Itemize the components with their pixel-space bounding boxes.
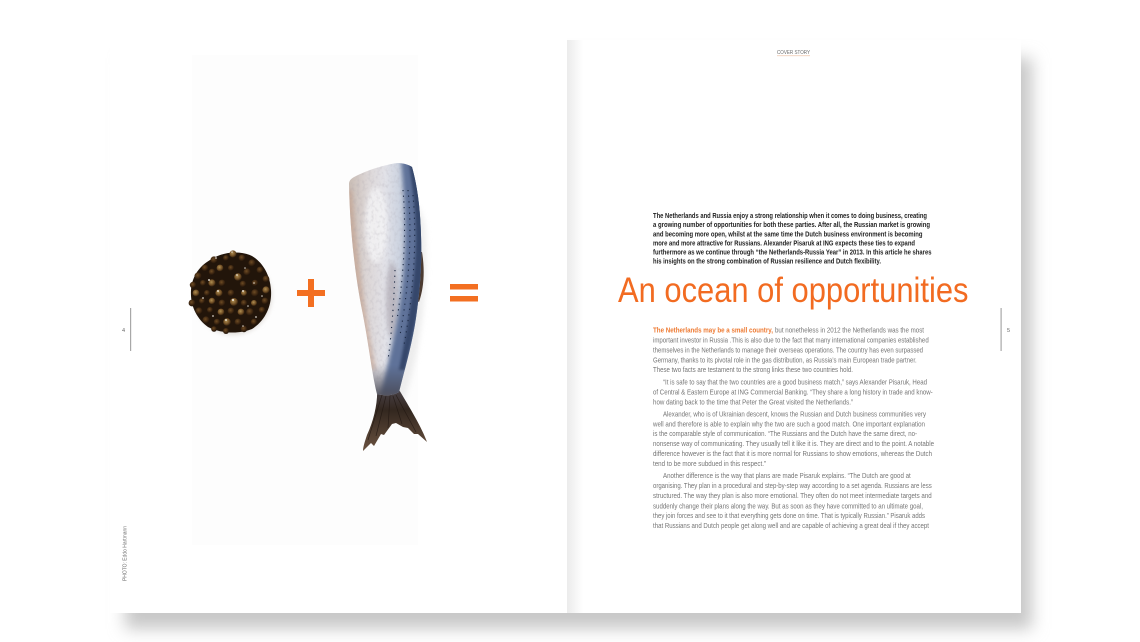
icon: herring fish — [345, 160, 427, 451]
text block: article body: Another difference is the way that plans are made Pisaruk explains. “The Dutch are good at — [663, 471, 911, 480]
gutter shading — [567, 40, 583, 613]
text block: article body: suddenly change their plans along the way. But as soon as they have committed to an ultimate goal, — [653, 501, 923, 510]
text block: article body: organising. They plan in a procedural and step-by-step way according to a set agenda. Russians are less — [653, 481, 932, 490]
text block: article body — [652, 326, 934, 530]
page marker: right page number: 5 — [1007, 328, 1010, 334]
text block: intro: The Netherlands and Russia enjoy a strong relationship when it comes to doing business, creating — [653, 211, 927, 220]
dorsal fin — [416, 252, 424, 302]
text block: intro — [653, 211, 932, 266]
text block: article body: difference however is the fact that it is more normal for Russians to show emotions, whereas the Dutch — [653, 449, 932, 458]
text block: article body: they join forces and see to it that everything gets done on time. That is typically Russian.” Pisaruk adds — [653, 511, 925, 520]
magazine spread drop shadow — [125, 58, 1032, 629]
text block: article body: of Central & Eastern Europe at ING Commercial Banking. “They share a long history in trade and know- — [653, 388, 933, 397]
page marker: left page number: 4 — [122, 328, 125, 334]
base of body shading — [372, 367, 404, 396]
text block: intro: furthermore as we continue through “the Netherlands-Russia Year” in 2013. In this article he shares — [653, 248, 932, 256]
fish body — [349, 163, 421, 395]
scale texture — [352, 164, 402, 370]
tail fin — [363, 388, 427, 451]
photo credit: PHOTO: Eddo Hartmann — [122, 526, 128, 581]
icon: equals sign — [450, 284, 478, 302]
text block: intro: and becoming more open, whilst at the same time the Dutch business environment is becoming — [653, 229, 922, 238]
page marker: left page number — [122, 308, 131, 351]
text block: article body: Alexander, who is of Ukrainian descent, knows the Russian and Dutch business communities very — [663, 409, 926, 418]
icon: plus sign — [297, 279, 325, 307]
text block: intro: more and more attractive for Russians. Alexander Pisaruk at ING expects these ties to expand — [653, 238, 915, 247]
text block: article body: themselves in the Netherlands to manage their overseas operations. The country has even surpassed — [653, 346, 923, 355]
text block: article body: how dating back to the time that Peter the Great visited the Netherlands.” — [653, 398, 853, 407]
title: An ocean of opportunities — [618, 270, 968, 310]
text block: article body: structured. The way they plan is also more emotional. They often do not meet intermediate targets and — [653, 491, 932, 500]
pale mottling — [346, 190, 376, 370]
text block: article body: important investor in Russia .This is also due to the fact that many international companies established — [653, 336, 929, 345]
tail fin rays — [368, 395, 416, 440]
text block: article body: nonsense way of communicating. They usually tell it like it is. They are direct and to the point. A notable — [653, 439, 934, 448]
text block: article body: The Netherlands may be a small country, — [653, 326, 773, 335]
panel: left page — [110, 30, 567, 613]
blue back band — [380, 160, 425, 395]
scale markings — [388, 190, 415, 360]
photo background — [192, 55, 418, 545]
text block: article body: “It is safe to say that the two countries are a good business match,” says Alexander Pisaruk, Head — [663, 378, 927, 387]
text block: article body: These two facts are testament to the strong links these two countries hold. — [653, 365, 853, 374]
text block: article body: tend to be more subdued in this respect.” — [653, 459, 766, 468]
icon: caviar — [189, 250, 272, 335]
panel: right page — [567, 40, 1021, 613]
text block: article body: Germany, thanks to its pivotal role in the gas distribution, as Russia’s main European trade partner. — [653, 356, 917, 365]
text block: article body: but nonetheless in 2012 the Netherlands was the most — [775, 326, 924, 335]
text block: intro: his insights on the strong combination of Russian resilience and Dutch flexibility. — [653, 257, 881, 266]
section label: COVER STORY — [777, 50, 810, 56]
text block: intro: a growing number of opportunities for both these parties. After all, the Russian market is growing — [653, 220, 930, 229]
page marker: right page number — [1000, 308, 1010, 351]
text block: article body: well and therefore is able to explain why the two are such a good match. One important explanation — [652, 419, 925, 428]
text block: article body: is the comparable style of communication. “The Russians and the Dutch have the same direct, no- — [653, 429, 917, 438]
text block: article body: that Russians and Dutch people get along well and are capable of achieving a great deal if they accept — [653, 521, 929, 530]
